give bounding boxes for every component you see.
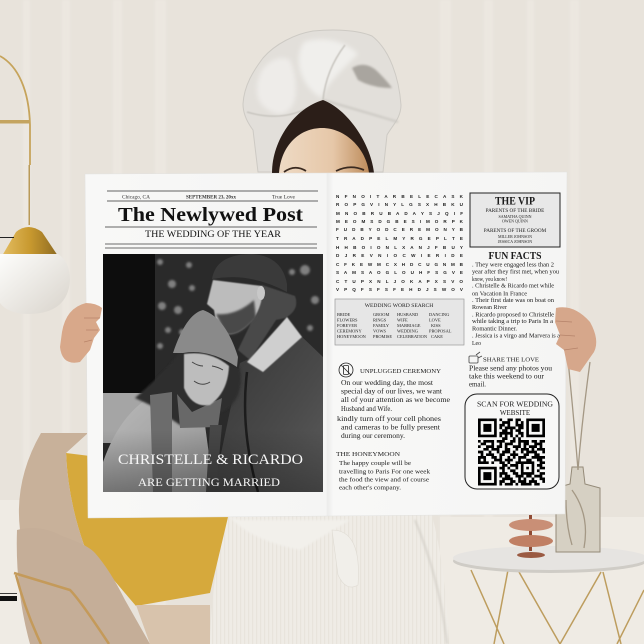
unplugged ceremony section: kindly turn off your cell phones (337, 414, 441, 423)
yellow cushion (66, 453, 228, 606)
lamp (0, 56, 70, 314)
word search list box: CEREMONY (337, 328, 362, 334)
subtitle: THE WEDDING OF THE YEAR (145, 229, 282, 240)
woman: towel and forehead (243, 30, 401, 173)
share the love section (469, 358, 553, 388)
word search grid: H H B O I O N L X A N J F B U Y (336, 245, 463, 250)
fun facts: Leo (472, 340, 481, 347)
photo caption: subtitle: ARE GETTING MARRIED (138, 477, 280, 489)
the VIP box: SAMATHA QUINN (498, 214, 532, 219)
word search grid: D J R E V N I O C W I E R I D E (336, 253, 463, 258)
fun facts: . Ricardo proposed to Christelle (472, 312, 554, 318)
man: jacket (213, 335, 323, 492)
word search list box: VOWS (373, 328, 386, 334)
woman: coat (103, 402, 208, 492)
fun facts: Rowean River (472, 304, 508, 311)
word search list box: HUSBAND (397, 312, 418, 317)
word search list box: WEDDING WORD SEARCH (365, 303, 433, 309)
word search list box: GROOM (373, 312, 389, 317)
unplugged ceremony section: and cameras to be fully present (341, 422, 441, 432)
shade behind caption (103, 440, 323, 492)
word search grid: V P Q F S F S F E H D J S W O V (336, 287, 464, 292)
woman: right hand (555, 307, 596, 372)
the VIP box: PARENTS OF THE GROOM (484, 228, 547, 234)
fun facts: while taking a trip to Paris In a (472, 318, 553, 325)
word search list box: BRIDE (337, 312, 350, 317)
the honeymoon section: the food the view and of course (339, 476, 429, 484)
word search grid: N F N O I T A R B E L E C A S K (336, 194, 464, 199)
word search grid: C T U P X N L J O K A P X S V O (336, 279, 463, 284)
word search list box: FLOWERS (337, 318, 358, 322)
edge marks (0, 593, 17, 601)
fun facts: FUN FACTS (488, 250, 542, 262)
fun facts (472, 250, 560, 347)
unplugged ceremony section: special day of our lives, we want (341, 386, 443, 396)
word search list box: KISS (431, 323, 441, 328)
man: beanie (212, 254, 287, 292)
the honeymoon section: travelling to Paris For one week (339, 468, 431, 476)
word search grid: M E O M S D G B E S I M O R P K (336, 219, 464, 224)
share the love section: SHARE THE LOVE (483, 358, 539, 364)
word search grid: S A M S A O G L O U H F S G V E (336, 270, 463, 275)
word search grid: F U D B Y O D C E R E M O N Y B (336, 227, 464, 232)
the honeymoon section: each other's company. (339, 484, 401, 492)
newspaper (85, 172, 567, 518)
photo caption: names: CHRISTELLE & RICARDO (118, 452, 303, 468)
newspaper title: The Newlywed Post (118, 204, 303, 226)
unplugged ceremony section: Husband and Wife. (341, 404, 392, 413)
QR code card: SCAN FOR WEDDING (477, 400, 553, 408)
QR code (478, 418, 545, 486)
word search list box: WEDDING (397, 328, 419, 334)
word search list box: HONEYMOON (337, 334, 367, 339)
word search list box: LOVE (429, 318, 441, 322)
word search list box: FAMILY (373, 323, 390, 328)
masthead: Chicago, CA (122, 194, 150, 200)
word search grid (336, 194, 464, 292)
word search list box: MARRIAGE (397, 323, 421, 328)
woman: beanie (173, 310, 238, 367)
icon: hand holding phone (469, 352, 482, 363)
couple photo (103, 254, 323, 492)
masthead: SEPTEMBER 23, 20xx (186, 196, 237, 200)
woman: scarf (150, 392, 172, 492)
fun facts: . Jessica is a virgo and Marvera is a (472, 332, 560, 340)
fun facts: Romantic Dinner. (472, 326, 517, 332)
word search grid: T R A D P E L M Y R G E P L T E (336, 236, 463, 241)
icon: no phones (339, 363, 353, 377)
woman: hair (134, 368, 241, 426)
share the love section: email. (469, 380, 486, 388)
word search list box: WIFE (397, 318, 408, 322)
the VIP box: OWEN QUINN (502, 218, 528, 224)
fun facts: . They were engaged less than 2 (472, 262, 554, 268)
word search grid: M N O B R U B A D A Y S J Q I F (336, 211, 463, 216)
masthead: True Love (272, 194, 296, 200)
word search list box: PROMISE (373, 334, 392, 339)
word search list box: DANCING (429, 312, 450, 317)
unplugged ceremony section (337, 368, 451, 440)
word search grid: R O P G V I N Y L G S X H B K U (336, 202, 464, 207)
fun facts: . Christelle & Ricardo met while (472, 282, 554, 290)
the VIP box: PARENTS OF THE BRIDE (486, 208, 544, 214)
fun facts: know, you know! (472, 276, 507, 283)
side table with vase and candle holder (453, 360, 644, 644)
man: hair and neck (238, 285, 296, 360)
the honeymoon section (336, 451, 431, 492)
word search list box (335, 299, 464, 345)
woman: face (184, 353, 229, 405)
unplugged ceremony section: all of your attention as we become (341, 395, 451, 404)
share the love section: Please send any photos you (469, 364, 553, 372)
paper sheet (85, 172, 567, 518)
the VIP box (470, 193, 560, 247)
woman: left hand (60, 303, 102, 363)
the VIP box: JESSICA JOHNSON (498, 239, 532, 244)
man: face (207, 280, 262, 334)
fun facts: . Their first date was on boat on (472, 297, 555, 304)
word search list box: RINGS (373, 318, 387, 322)
the honeymoon section: THE HONEYMOON (336, 451, 400, 458)
fun facts: year after they first met, when you (472, 268, 560, 276)
armchair (14, 433, 210, 644)
QR code card: WEBSITE (500, 409, 530, 417)
the VIP box: THE VIP (495, 196, 535, 208)
QR code card (465, 394, 559, 489)
word search grid: C F K E W M C X H D C U G N M B (336, 262, 464, 267)
man: collar (247, 317, 302, 372)
woman: bathrobe (210, 515, 449, 644)
word search list box: PROPOSAL (429, 328, 452, 334)
word search list box: FOREVER (337, 323, 357, 328)
unplugged ceremony section: during our ceremony. (341, 431, 405, 440)
the honeymoon section: The happy couple will be (339, 460, 411, 467)
the VIP box: MILLER JOHNSON (498, 234, 532, 239)
word search list box: CELEBRATION (397, 334, 428, 339)
fun facts: on Vacation In France (472, 290, 527, 298)
masthead (105, 191, 318, 248)
unplugged ceremony section: UNPLUGGED CEREMONY (360, 368, 441, 375)
word search list box: CAKE (431, 334, 443, 339)
unplugged ceremony section: On our wedding day, the most (341, 378, 434, 387)
share the love section: take this weekend to our (469, 372, 545, 380)
